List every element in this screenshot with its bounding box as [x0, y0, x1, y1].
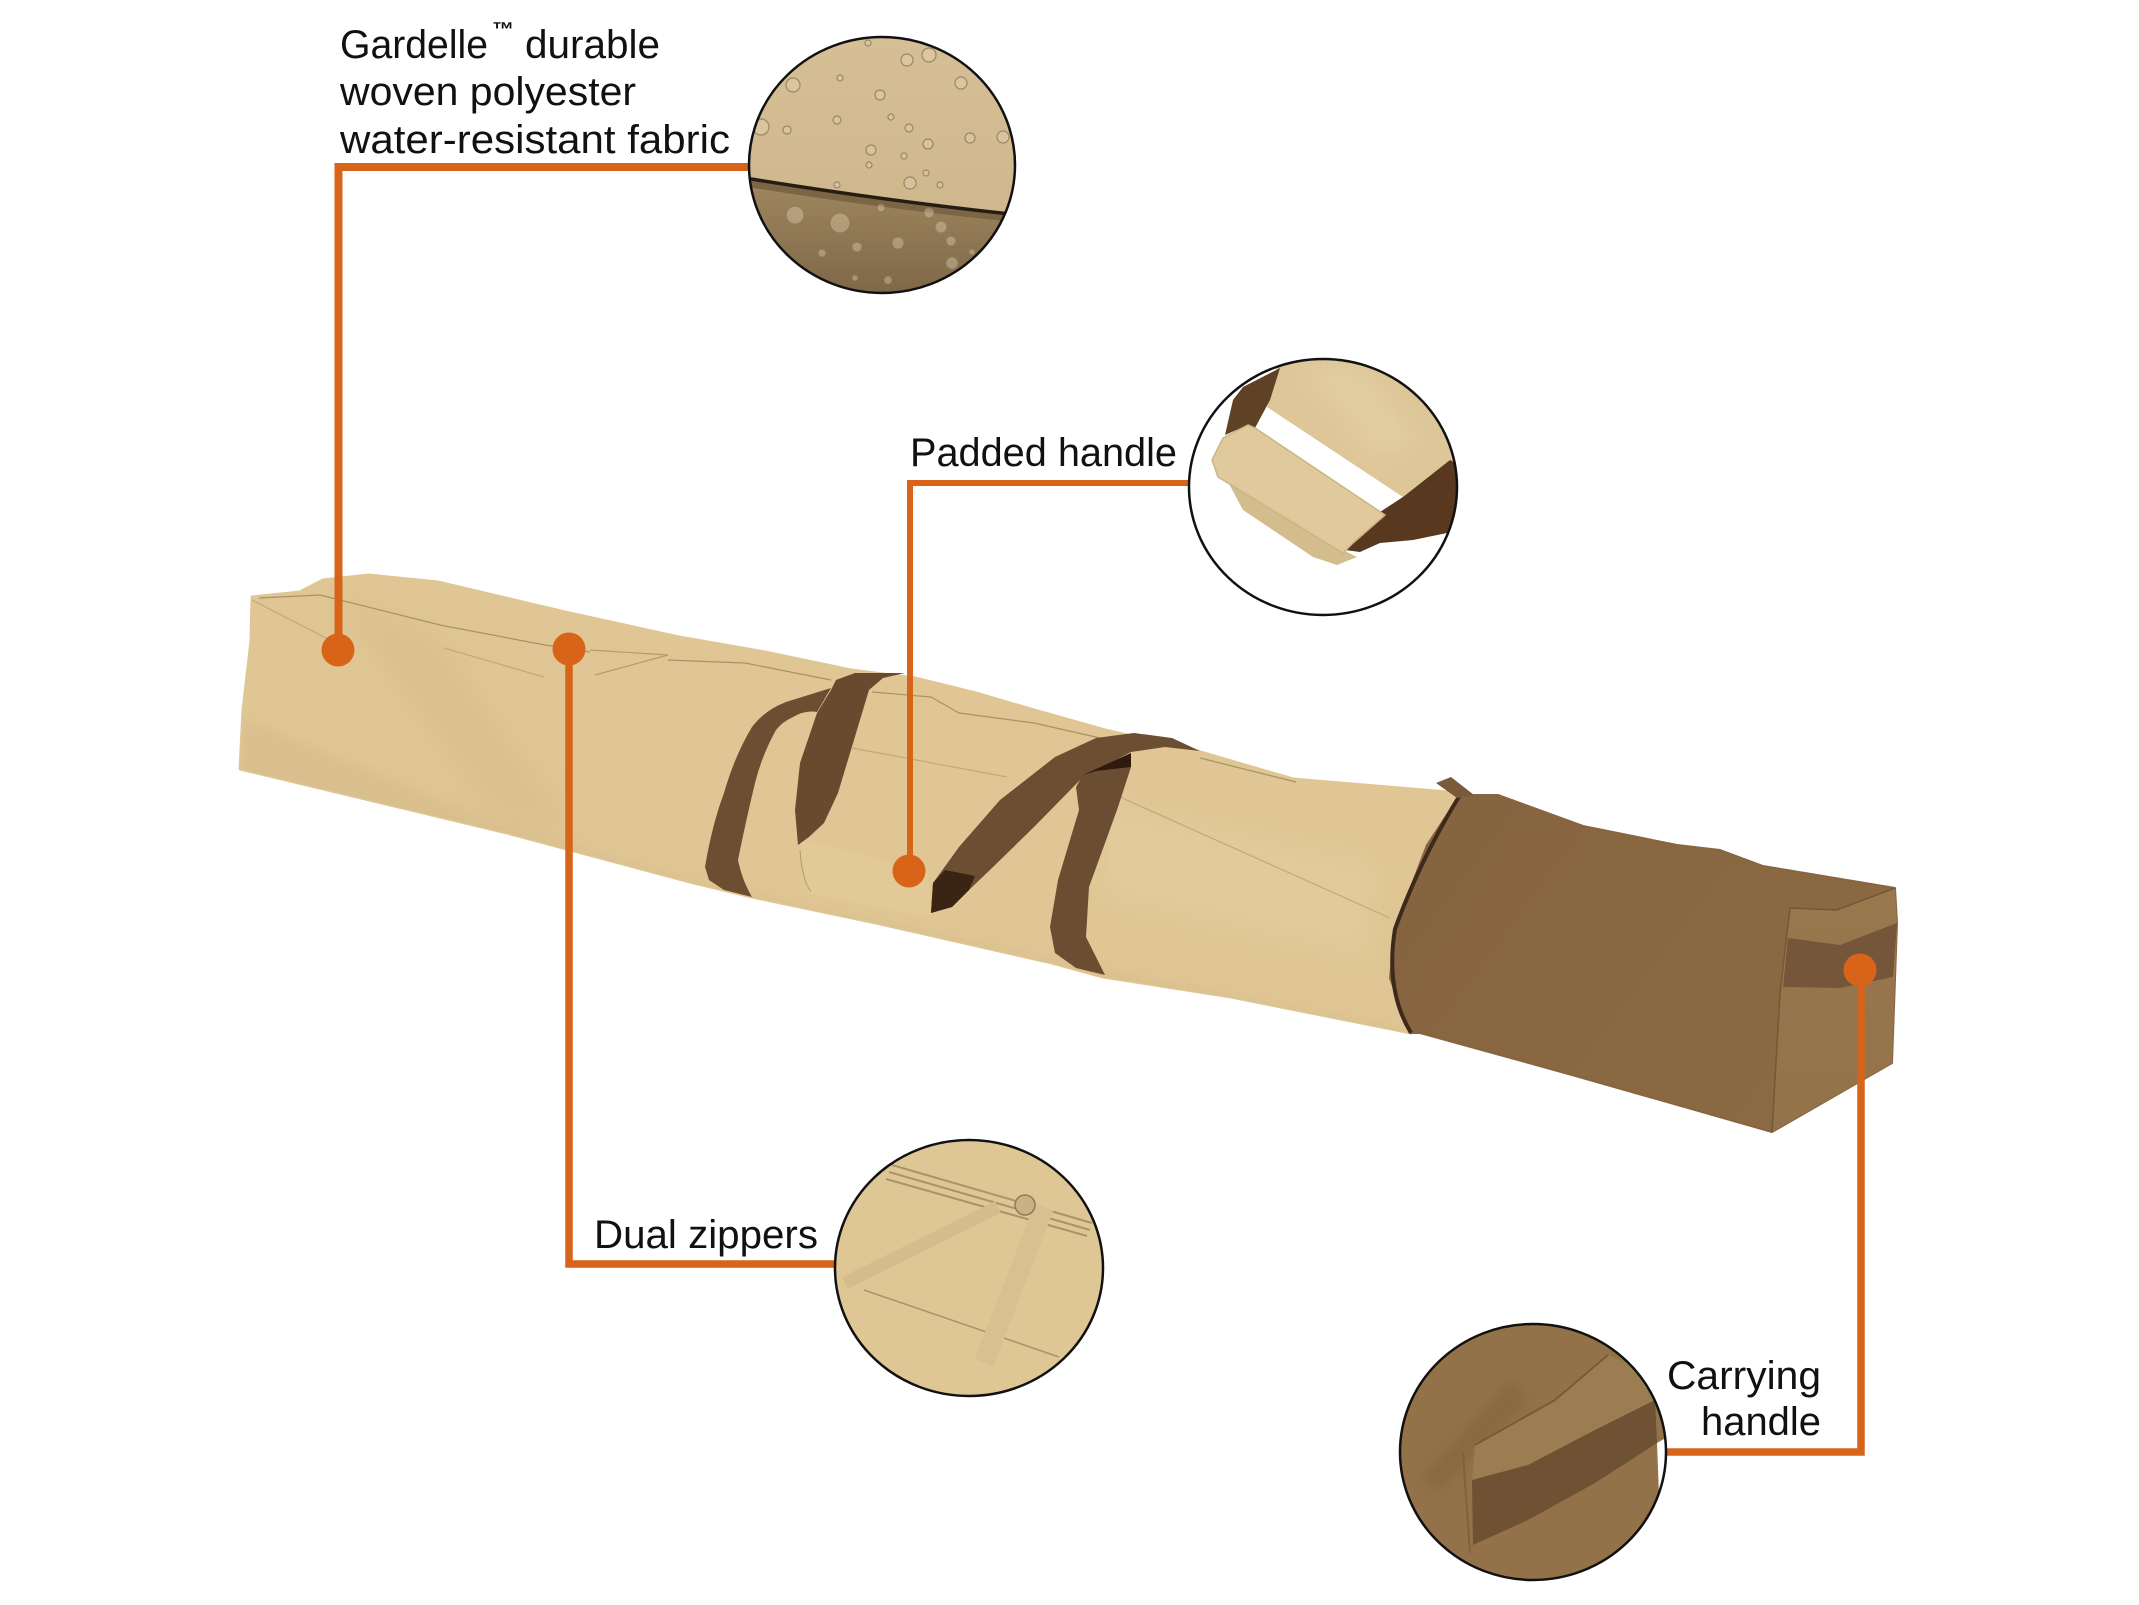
marker dot: fabric [322, 634, 354, 666]
label: carrying handle: Carrying [1667, 1354, 1821, 1398]
fold stitch [1772, 888, 1895, 1132]
pad: main handle grip [800, 838, 931, 917]
strap: right vertical [1050, 753, 1131, 975]
bag top fold [1763, 866, 1837, 910]
label: carrying handle [1667, 1354, 1821, 1444]
bag body: tan section [240, 575, 1460, 1033]
marker dot: carrying handle [1844, 954, 1876, 986]
fabric shading [240, 600, 1400, 1050]
detail circle: carrying handle [1395, 1320, 1680, 1585]
zipper line [259, 595, 1296, 782]
detail circle: dual zippers [830, 1135, 1110, 1405]
callout line: carrying handle [1660, 970, 1861, 1452]
label: carrying handle: handle [1701, 1400, 1821, 1444]
end strap: carrying handle [1783, 923, 1897, 988]
label: dual zippers: Dual zippers [594, 1213, 818, 1257]
top tab [1436, 777, 1474, 798]
label: fabric: water-resistant fabric [339, 118, 730, 162]
zipper pull on bag [590, 650, 668, 675]
detail circle: fabric with water droplets [748, 36, 1016, 294]
pocket line [252, 600, 1390, 918]
bag end face [1772, 888, 1897, 1132]
callout line: zippers [569, 649, 840, 1264]
strap: right arc dark underside [931, 870, 975, 913]
label: fabric: durable [525, 23, 660, 67]
callout line: padded handle [910, 483, 1195, 871]
strap: right arc [931, 733, 1200, 913]
strap: left arc [705, 688, 831, 897]
marker dot: zippers [552, 632, 586, 666]
label: fabric [339, 19, 730, 162]
label: fabric: Gardelle [340, 23, 488, 67]
callout line: fabric [338, 167, 760, 650]
brown section side [1390, 795, 1897, 1132]
marker dot: padded handle [892, 854, 926, 888]
label: fabric: ™ [492, 19, 514, 41]
pad seam [800, 850, 811, 892]
label: fabric: woven polyester [339, 70, 636, 114]
product illustration: storage bag [240, 575, 1897, 1132]
detail circle: padded handle [1188, 358, 1458, 616]
label: padded handle: Padded handle [910, 431, 1177, 475]
strap: left vertical [795, 673, 905, 845]
strap: right vertical dark underside [1083, 753, 1131, 775]
seam piping [1392, 795, 1460, 1033]
